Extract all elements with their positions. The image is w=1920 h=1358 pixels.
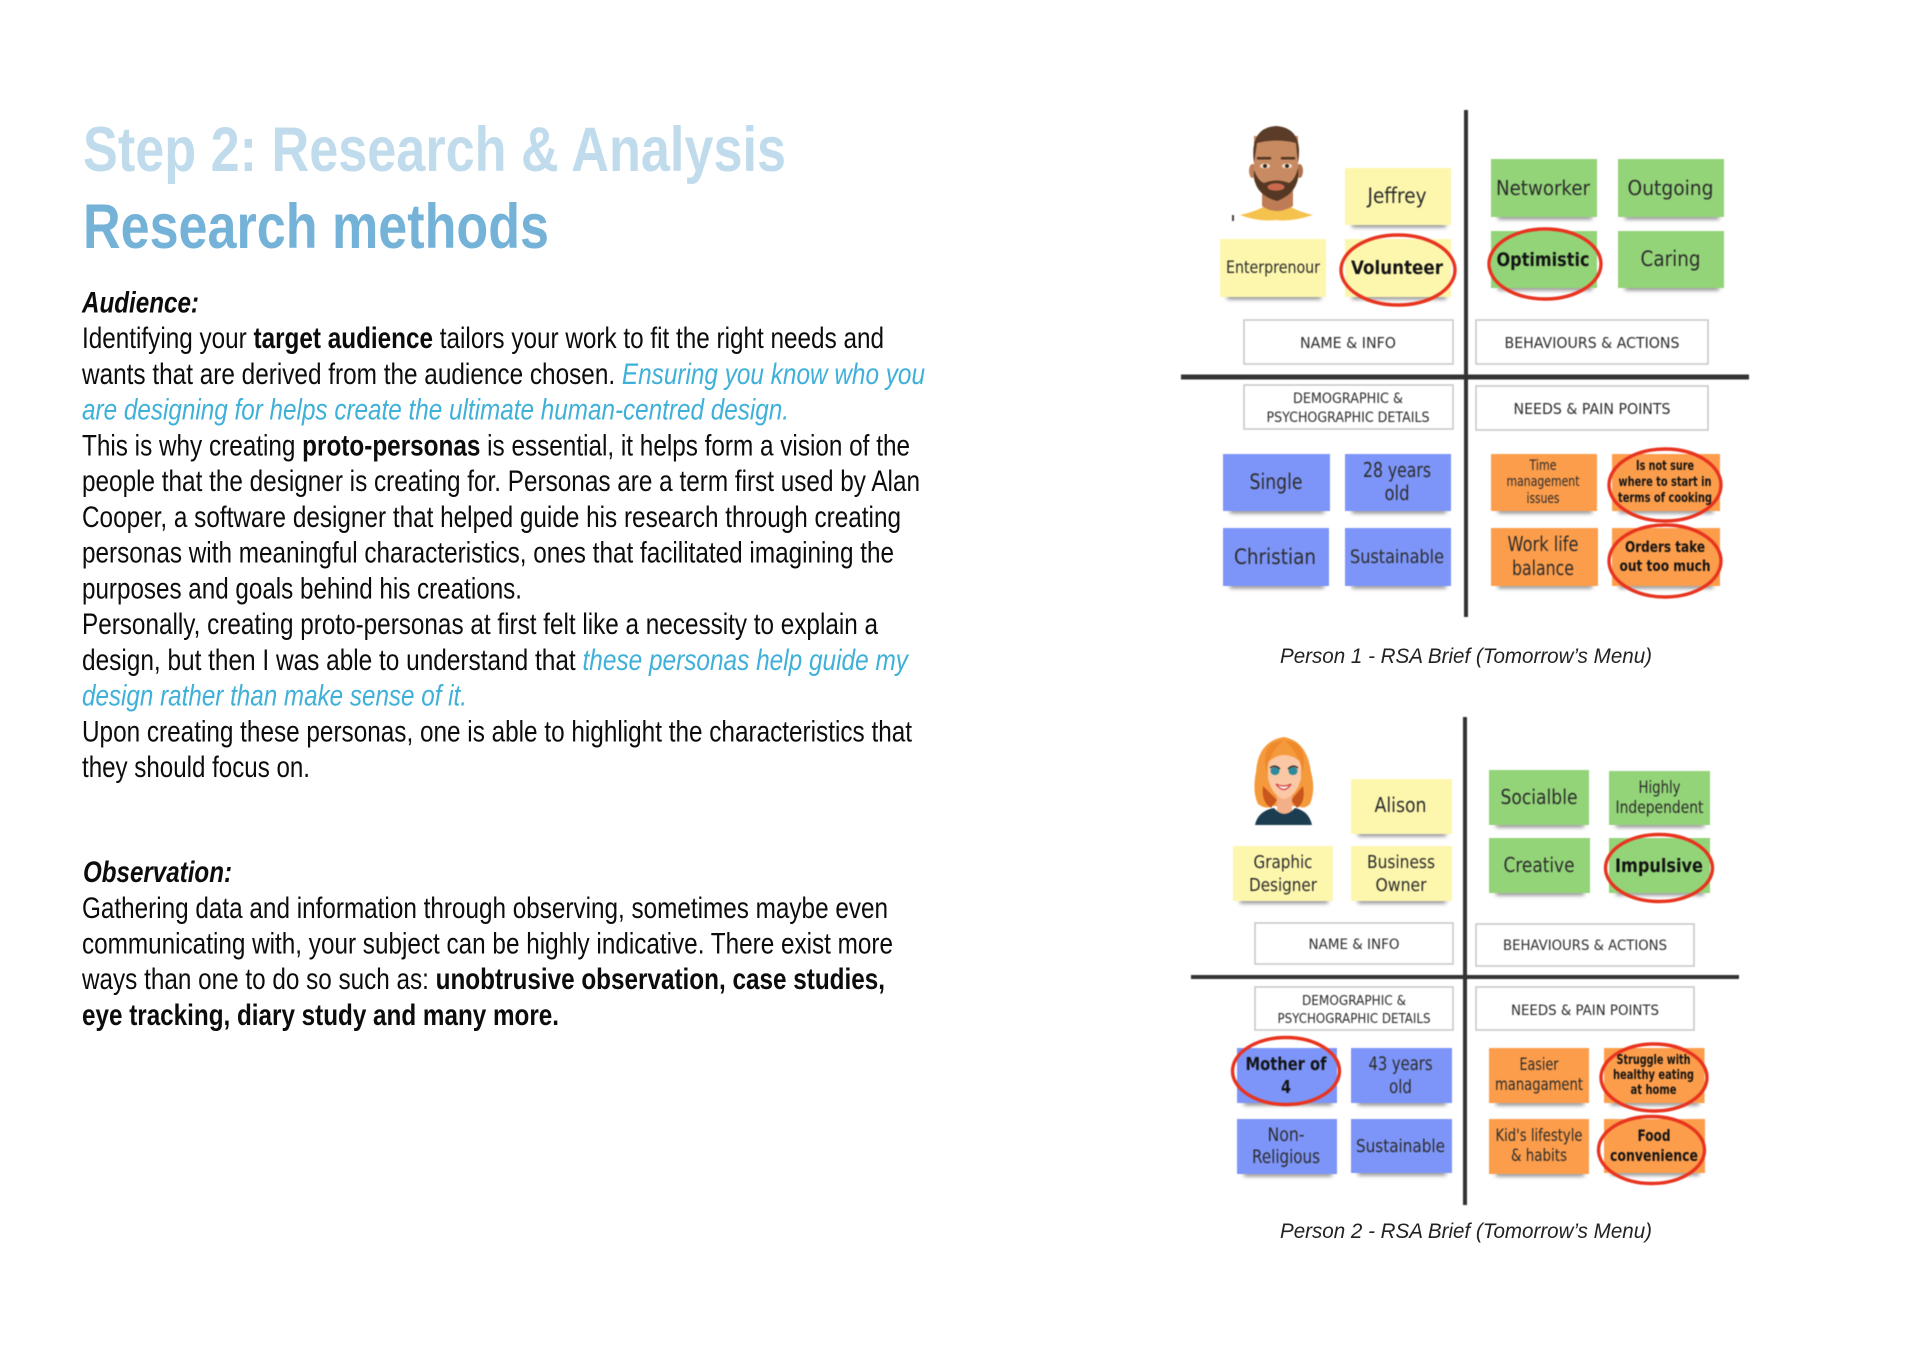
sticky: Mother of 4 xyxy=(1232,1038,1340,1105)
sticky: Impulsive xyxy=(1606,834,1712,902)
caption: person 1: Person 1 - RSA Brief (Tomorrow’s Menu) xyxy=(1280,645,1652,668)
sticky: Is not sure where to start: terms of cooking xyxy=(1618,491,1712,506)
sticky: Optimistic: Optimistic xyxy=(1496,249,1590,271)
icon: female avatar xyxy=(1254,737,1313,825)
sticky: Alison xyxy=(1351,779,1452,836)
sticky: Kid's lifestyle and habits xyxy=(1489,1119,1589,1176)
text block: audience: people that the designer is creating for. Personas are a term first used by Alan xyxy=(82,465,920,498)
sticky: Sustainable xyxy=(1345,528,1451,588)
label: demographic details: DEMOGRAPHIC & xyxy=(1302,994,1406,1009)
sticky: 43 years old: 43 years xyxy=(1368,1053,1432,1075)
sticky: Business Owner: Owner xyxy=(1376,875,1427,896)
sticky: Work life balance xyxy=(1491,528,1598,588)
sticky: Enterprenour: Enterprenour xyxy=(1226,258,1320,277)
sticky: Is not sure where to start: Is not sure xyxy=(1636,459,1694,474)
text block: audience: This is why creating proto-personas is essential, it helps form a vision of the xyxy=(82,429,910,462)
text block: observation: eye tracking, diary study and many more. xyxy=(82,999,559,1032)
sticky: Alison: Alison xyxy=(1374,793,1426,817)
text block: audience: design, but then I was able to understand that these personas help guide my xyxy=(82,644,910,677)
sticky: Kid's lifestyle and habits: & habits xyxy=(1511,1146,1567,1166)
sticky: Christian xyxy=(1223,528,1329,588)
label: name and info xyxy=(1255,923,1453,964)
sticky: Orders take out too much xyxy=(1609,525,1721,597)
sticky: Outgoing xyxy=(1618,159,1724,219)
sticky: Time management issues: issues xyxy=(1526,491,1560,507)
sticky: Enterprenour xyxy=(1220,239,1326,299)
sticky: Socialble: Socialble xyxy=(1500,785,1578,809)
sticky: Optimistic xyxy=(1489,229,1601,299)
text block: audience: design rather than make sense of it. xyxy=(82,680,467,712)
sticky: Socialble xyxy=(1489,770,1589,827)
sticky: Struggle with healthy eating: at home xyxy=(1630,1083,1677,1098)
sticky: Graphic Designer xyxy=(1233,846,1333,903)
sticky: Networker xyxy=(1491,159,1597,219)
sticky: 43 years old: old xyxy=(1389,1076,1412,1098)
sticky: Non-Religious xyxy=(1237,1119,1337,1176)
sticky: Food convenience xyxy=(1598,1116,1705,1184)
sticky: Jeffrey: Jeffrey xyxy=(1366,184,1426,208)
text block: observation: ways than one to do so such as: unobtrusive observation, case studies, xyxy=(81,963,885,996)
sticky: 28 years old: old xyxy=(1384,481,1410,505)
text block: audience xyxy=(81,286,925,784)
sticky: Networker: Networker xyxy=(1496,176,1591,200)
text block: audience: purposes and goals behind his creations. xyxy=(82,572,522,605)
label: demographic details: PSYCHOGRAPHIC DETAILS xyxy=(1278,1012,1430,1027)
text block: observation: Observation: xyxy=(83,856,232,889)
text block: observation xyxy=(81,856,893,1032)
sticky: Is not sure where to start xyxy=(1609,449,1721,521)
sticky: Mother of 4: Mother of xyxy=(1246,1054,1327,1075)
sticky: Sustainable: Sustainable xyxy=(1350,546,1444,568)
sticky: Kid's lifestyle and habits: Kid's lifestyle xyxy=(1496,1126,1582,1146)
sticky: Volunteer xyxy=(1341,235,1455,305)
sticky: Orders take out too much: out too much xyxy=(1620,557,1710,575)
panel: person 1 persona grid xyxy=(1181,110,1749,617)
label: behaviours and actions: BEHAVIOURS & ACTIONS xyxy=(1503,938,1667,954)
label: behaviours and actions xyxy=(1476,924,1694,966)
sticky: Single xyxy=(1223,454,1330,513)
label: demographic details: PSYCHOGRAPHIC DETAILS xyxy=(1266,410,1430,426)
caption: person 2: Person 2 - RSA Brief (Tomorrow’s Menu) xyxy=(1280,1220,1652,1243)
sticky: Volunteer: Volunteer xyxy=(1351,257,1444,279)
sticky: Time management issues: management xyxy=(1506,474,1580,490)
sticky: Caring: Caring xyxy=(1640,247,1700,271)
label: needs and pain points: NEEDS & PAIN POINTS xyxy=(1511,1003,1659,1019)
sticky: 28 years old xyxy=(1345,454,1451,513)
sticky: Sustainable xyxy=(1351,1119,1452,1175)
sticky: Easier managament: managament xyxy=(1495,1075,1583,1095)
text block: audience: they should focus on. xyxy=(82,751,310,784)
sticky: Non-Religious: Non- xyxy=(1268,1124,1304,1146)
sticky: Time management issues xyxy=(1491,454,1597,513)
text block: audience: Identifying your target audience tailors your work to fit the right needs and xyxy=(82,322,884,355)
sticky: Impulsive: Impulsive xyxy=(1615,855,1703,877)
label: name and info: NAME & INFO xyxy=(1300,334,1396,352)
sticky: Jeffrey xyxy=(1345,168,1451,227)
text block: audience: personas with meaningful characteristics, ones that facilitated imagining the xyxy=(82,536,894,570)
sticky: Easier managament: Easier xyxy=(1520,1055,1559,1075)
sticky: Single: Single xyxy=(1250,470,1302,494)
sticky: 28 years old: 28 years xyxy=(1363,458,1431,482)
title: research methods: Research methods xyxy=(83,192,549,262)
sticky: Highly Independent: Independent xyxy=(1616,798,1704,818)
label: demographic details xyxy=(1244,385,1453,429)
sticky: Time management issues: Time xyxy=(1529,458,1556,474)
label: demographic details: DEMOGRAPHIC & xyxy=(1293,391,1403,407)
text block: audience: Personally, creating proto-personas at first felt like a necessity to explain a xyxy=(82,608,878,641)
label: needs and pain points xyxy=(1476,386,1708,430)
sticky: Business Owner: Business xyxy=(1367,852,1435,873)
sticky: Creative: Creative xyxy=(1504,853,1574,877)
sticky: Is not sure where to start: where to start in xyxy=(1618,475,1712,490)
label: behaviours and actions: BEHAVIOURS & ACTIONS xyxy=(1504,334,1680,352)
sticky: Work life balance: balance xyxy=(1512,556,1574,580)
sticky: Caring xyxy=(1618,231,1724,290)
sticky: Graphic Designer: Graphic xyxy=(1254,852,1312,873)
label: name and info xyxy=(1244,320,1453,364)
sticky: Food convenience: convenience xyxy=(1610,1146,1698,1165)
sticky: Creative xyxy=(1489,838,1590,895)
sticky: Business Owner xyxy=(1351,846,1452,903)
text block: audience: are designing for helps create the ultimate human-centred design. xyxy=(82,394,789,426)
sticky: Graphic Designer: Designer xyxy=(1249,875,1318,896)
text block: observation: Gathering data and information through observing, sometimes maybe even xyxy=(82,892,888,925)
sticky: Highly Independent: Highly xyxy=(1638,778,1680,798)
sticky: Food convenience: Food xyxy=(1638,1126,1670,1145)
text block: audience: wants that are derived from the audience chosen. Ensuring you know who you xyxy=(81,358,925,391)
icon: male avatar xyxy=(1232,126,1313,221)
sticky: Sustainable: Sustainable xyxy=(1356,1136,1445,1157)
sticky: Outgoing: Outgoing xyxy=(1628,176,1714,200)
text block: observation: communicating with, your subject can be highly indicative. There exist more xyxy=(82,928,893,960)
label: behaviours and actions xyxy=(1476,320,1708,364)
sticky: Struggle with healthy eating: Struggle with xyxy=(1616,1053,1690,1068)
sticky: 43 years old xyxy=(1351,1048,1452,1105)
sticky: Non-Religious: Religious xyxy=(1252,1146,1320,1168)
sticky: Easier managament xyxy=(1489,1048,1589,1105)
text block: audience: Cooper, a software designer that helped guide his research through creating xyxy=(82,501,901,534)
sticky: Orders take out too much: Orders take xyxy=(1625,538,1705,556)
sticky: Struggle with healthy eating xyxy=(1601,1044,1707,1111)
sticky: Work life balance: Work life xyxy=(1508,532,1578,556)
sticky: Mother of 4: 4 xyxy=(1281,1077,1291,1098)
title: step heading: Step 2: Research & Analysis xyxy=(83,115,786,185)
sticky: Highly Independent xyxy=(1609,771,1710,827)
text block: audience: Audience: xyxy=(81,286,199,320)
sticky: Struggle with healthy eating: healthy eating xyxy=(1613,1068,1694,1083)
text block: audience: Upon creating these personas, one is able to highlight the characteristics that xyxy=(82,715,912,748)
label: name and info: NAME & INFO xyxy=(1308,937,1400,953)
label: demographic details xyxy=(1255,987,1453,1030)
label: needs and pain points xyxy=(1476,987,1694,1030)
sticky: Christian: Christian xyxy=(1234,545,1316,569)
label: needs and pain points: NEEDS & PAIN POINTS xyxy=(1514,400,1670,418)
panel: person 2 persona grid xyxy=(1191,717,1739,1205)
